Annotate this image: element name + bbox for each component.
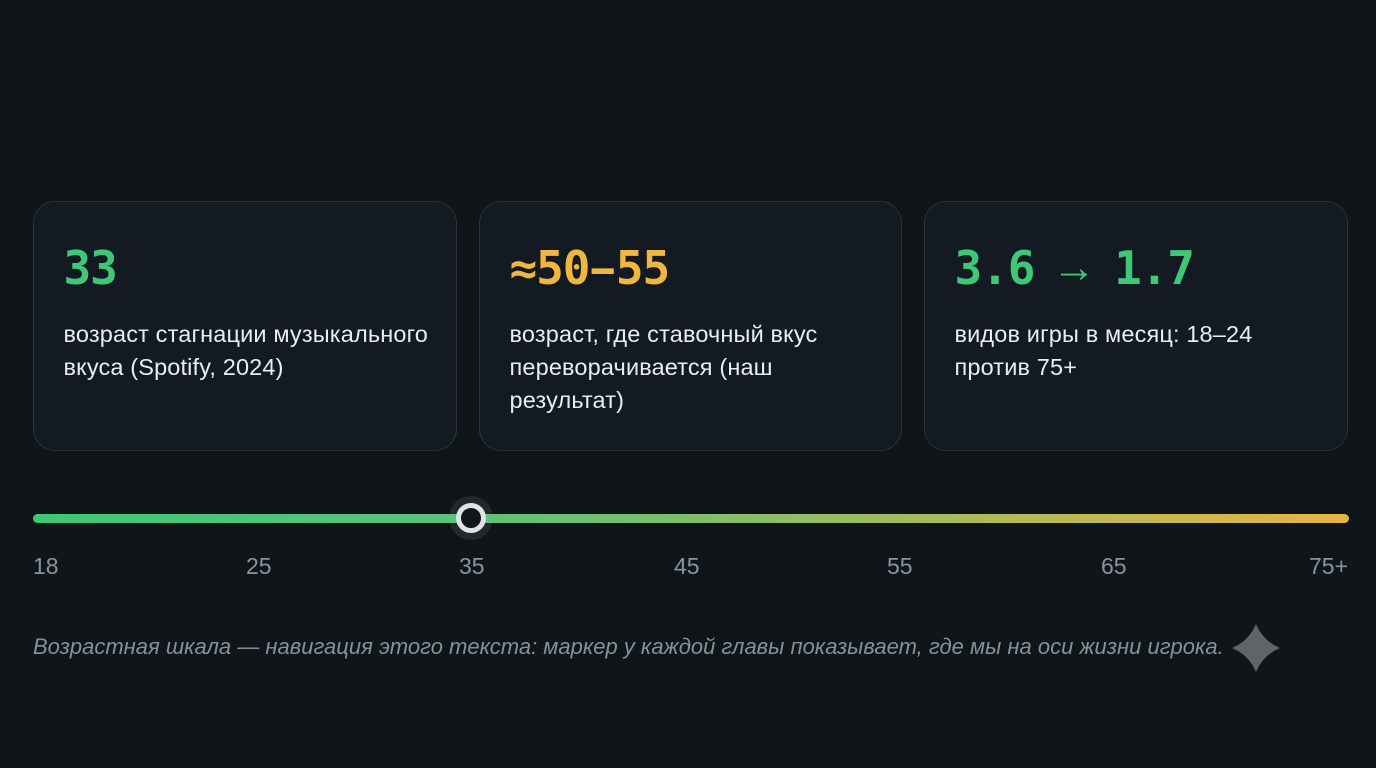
stat description: betting taste: возраст, где ставочный вкус bbox=[510, 321, 817, 347]
age marker ring bbox=[456, 503, 486, 533]
stat description: betting taste bbox=[510, 321, 817, 413]
stat description: game views: против 75+ bbox=[954, 354, 1077, 380]
stat description: game views: видов игры в месяц: 18–24 bbox=[954, 321, 1252, 347]
panel: stat card 50-55 bbox=[479, 201, 902, 451]
stat number: 3.6 to 1.7: 3.6 1.7 bbox=[954, 241, 1194, 295]
age scale track bbox=[33, 514, 1349, 523]
stat description: betting taste: переворачивается (наш bbox=[510, 354, 773, 380]
stat description: betting taste: результат) bbox=[510, 387, 624, 413]
tick label 55: 55 bbox=[887, 553, 913, 579]
tick label 18: 18 bbox=[33, 553, 59, 579]
caption: Возрастная шкала — навигация этого текста: маркер у каждой главы показывает, где мы на оси жизни игрока. bbox=[33, 634, 1224, 659]
panel: stat card 33 bbox=[33, 201, 457, 451]
tick label 75+: 75+ bbox=[1309, 553, 1348, 579]
stat number: 3.6 to 1.7: → bbox=[1061, 246, 1087, 296]
panel: stat card 3.6 to 1.7 bbox=[924, 201, 1348, 451]
stat description: game views bbox=[954, 321, 1252, 380]
age marker halo bbox=[449, 496, 493, 540]
stat number: 33: 33 bbox=[64, 241, 117, 295]
stat description: music taste: возраст стагнации музыкального bbox=[64, 321, 428, 347]
tick label 35: 35 bbox=[459, 553, 485, 579]
stat number: 50-55: ≈50 55 bbox=[510, 241, 669, 295]
stat description: music taste: вкуса (Spotify, 2024) bbox=[64, 354, 284, 380]
stat description: music taste bbox=[64, 321, 428, 380]
tick label 45: 45 bbox=[674, 553, 700, 579]
tick label 25: 25 bbox=[246, 553, 272, 579]
tick label 65: 65 bbox=[1101, 553, 1127, 579]
stat number: 50-55: – bbox=[592, 241, 613, 295]
icon: four-point sparkle bbox=[1232, 624, 1280, 672]
